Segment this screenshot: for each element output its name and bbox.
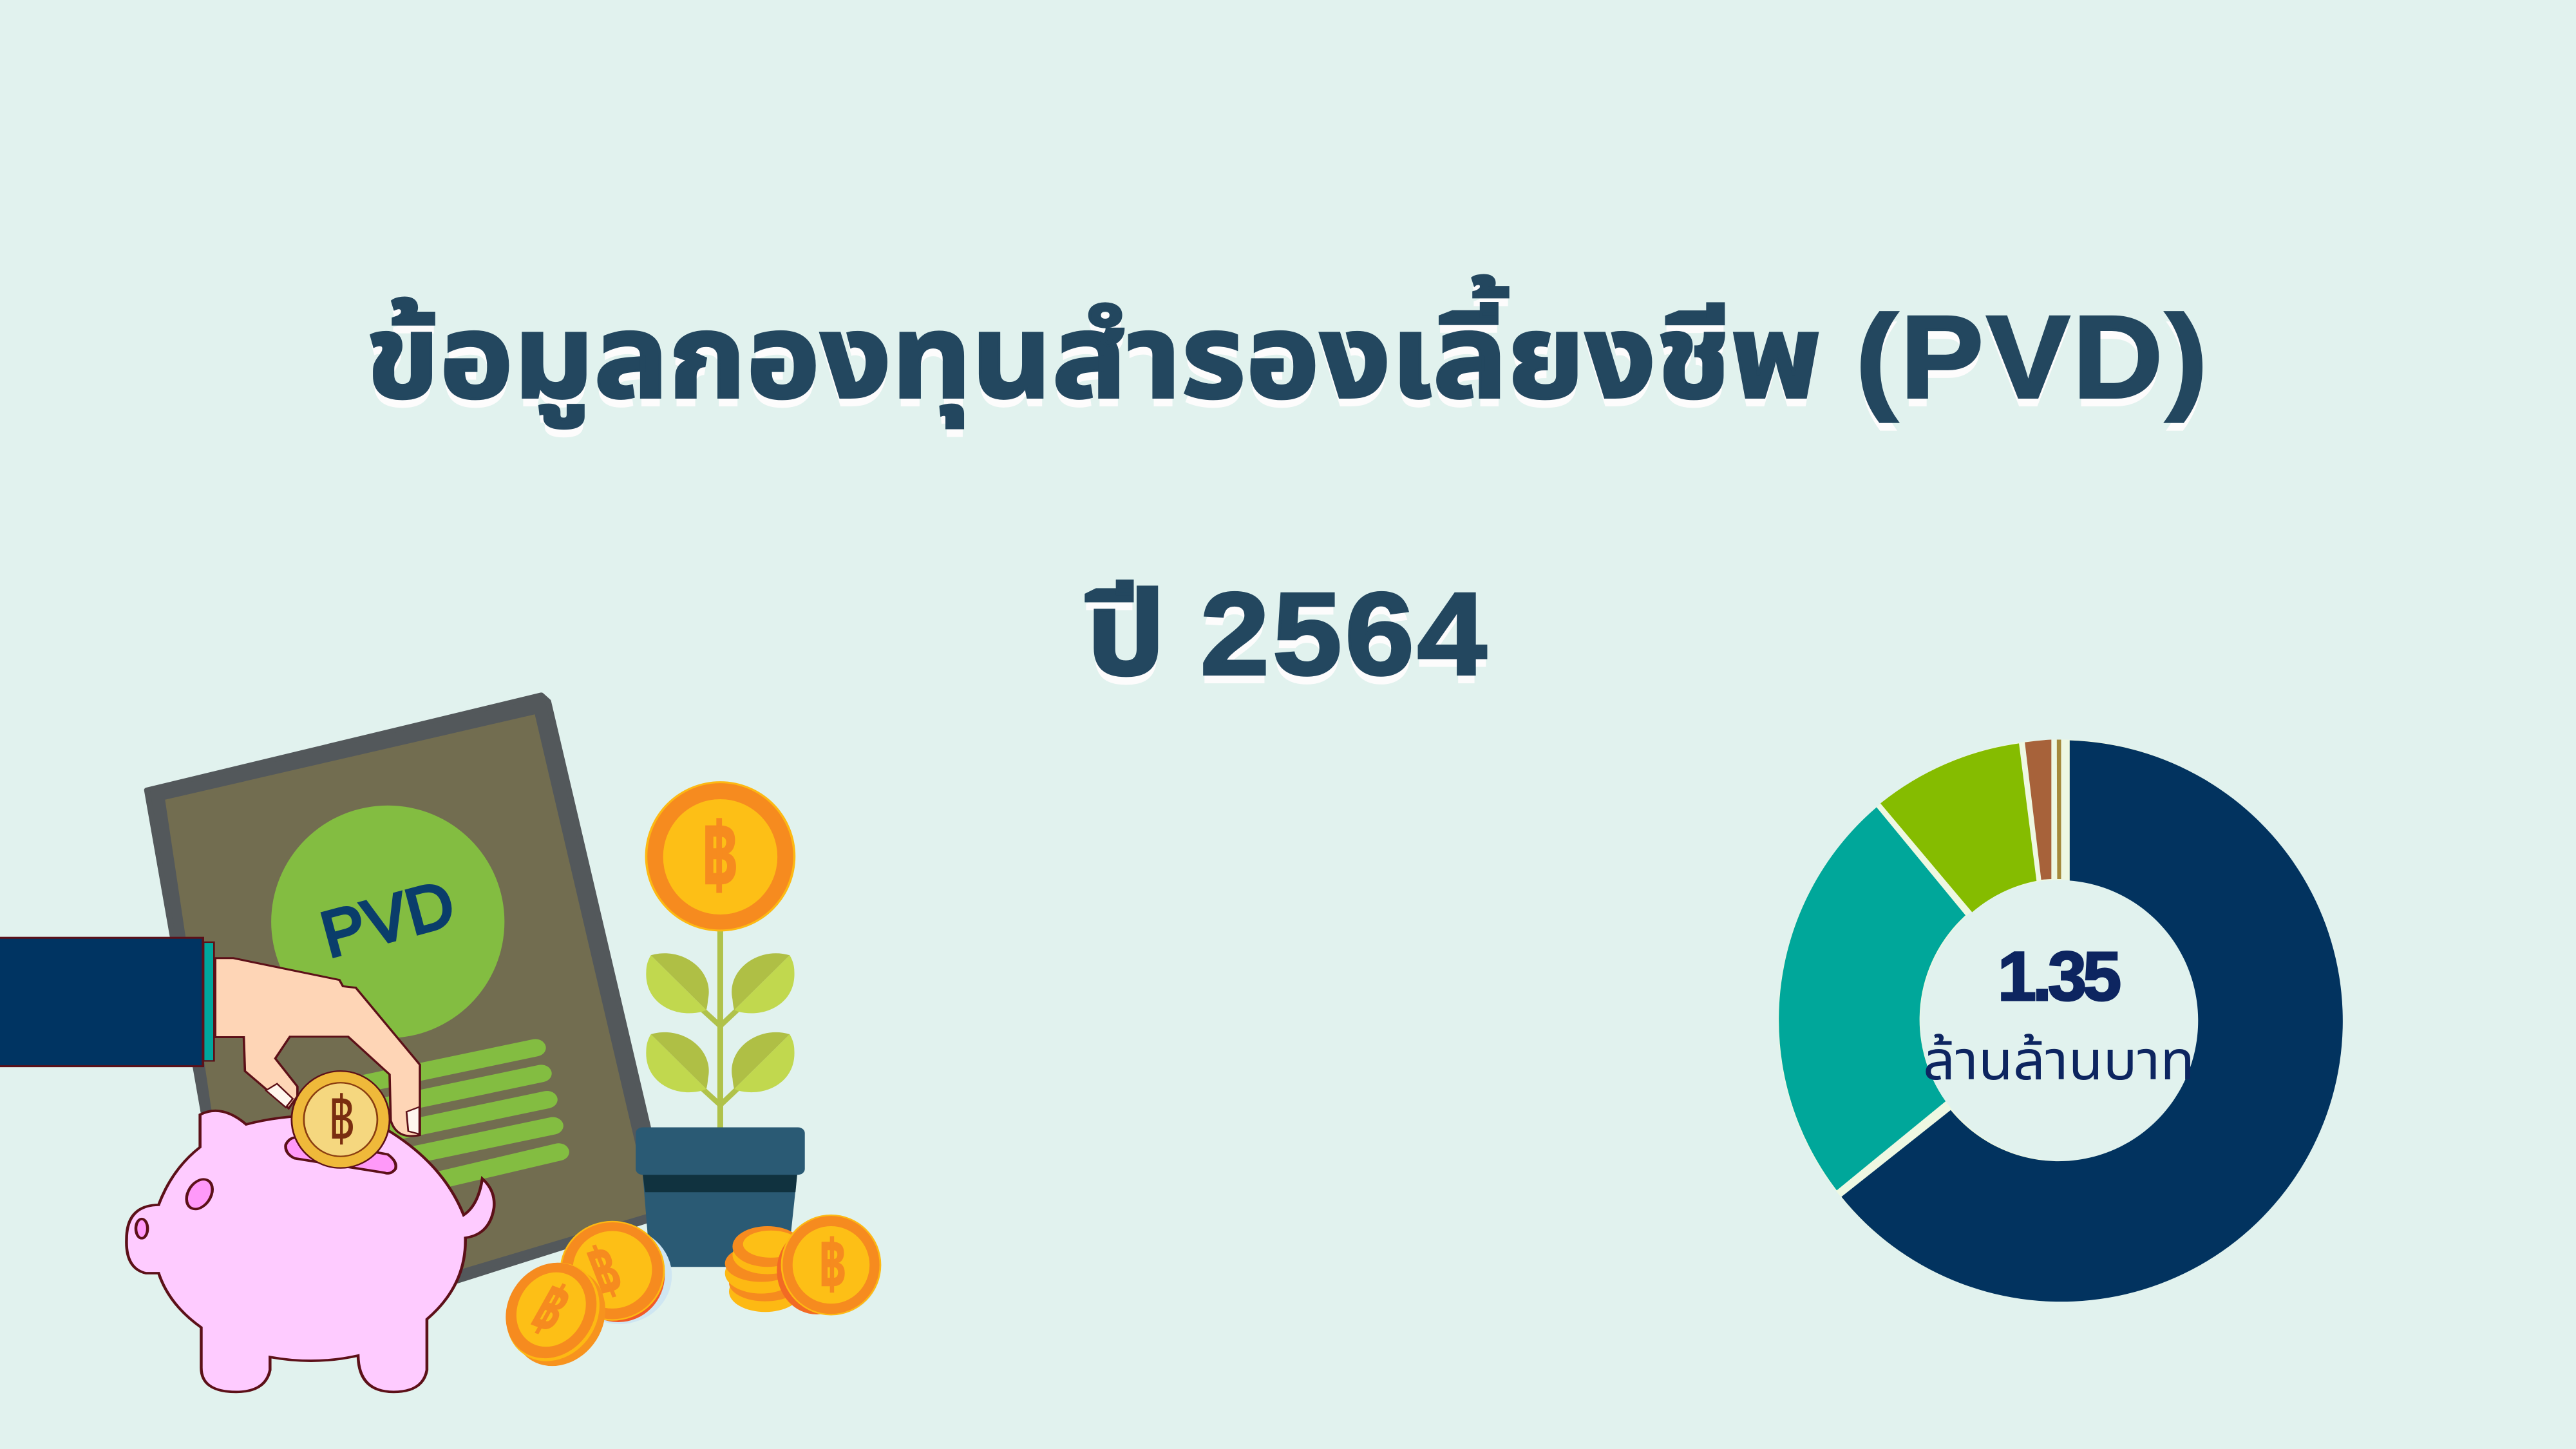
cuff bbox=[204, 942, 214, 1061]
document lines bbox=[361, 1048, 559, 1188]
coin in hand bbox=[292, 1071, 390, 1170]
coins on the ground, left pair: ฿ bbox=[575, 1224, 638, 1325]
potted coin plant bbox=[636, 781, 805, 1267]
segment: navy bbox=[1841, 741, 2343, 1302]
stem bbox=[717, 927, 723, 1130]
sleeve bbox=[0, 938, 203, 1066]
tablet with PVD document bbox=[147, 695, 668, 1349]
nostril bbox=[136, 1219, 147, 1238]
coin stack, right bbox=[725, 1215, 881, 1319]
title line 1: ข้อมูลกองทุนสำรองเลี้ยงชีพ (PVD) bbox=[366, 291, 2210, 422]
coin in hand: ฿ bbox=[328, 1074, 355, 1170]
segment: lime bbox=[1880, 743, 2036, 913]
coin stack, right: ฿ bbox=[819, 1217, 847, 1319]
segment: teal bbox=[1779, 807, 1965, 1190]
piggy bank bbox=[126, 1111, 494, 1392]
leaves bbox=[646, 953, 795, 1092]
hand with sleeve bbox=[0, 938, 420, 1136]
coins on the ground, left pair: ฿ bbox=[512, 1262, 587, 1361]
segment: brown bbox=[2025, 739, 2051, 880]
PVD label: PVD bbox=[314, 867, 462, 971]
coin flower: ฿ bbox=[701, 791, 739, 927]
center unit: ล้านล้านบาท bbox=[1923, 1030, 2195, 1091]
donut gap ring bbox=[1778, 739, 2342, 1301]
eye bbox=[182, 1176, 217, 1212]
flower pot bbox=[636, 1127, 805, 1267]
nails bbox=[266, 1084, 419, 1134]
segment: tan bbox=[2057, 739, 2061, 879]
hand bbox=[215, 958, 420, 1136]
coin slot bbox=[286, 1137, 396, 1173]
title line 2: year: ปี 2564 bbox=[1086, 568, 1490, 699]
title bbox=[366, 274, 2210, 699]
coin flower bbox=[645, 781, 795, 931]
green circle bbox=[271, 806, 504, 1038]
center value: 1.35 bbox=[1998, 937, 2120, 1015]
coins on the ground, left pair bbox=[493, 1221, 672, 1375]
branches bbox=[703, 1010, 737, 1105]
